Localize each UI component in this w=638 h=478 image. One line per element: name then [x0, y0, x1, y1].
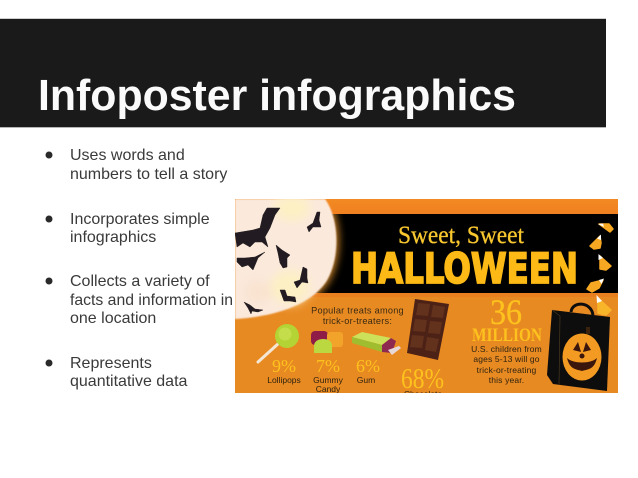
- bat: large: [235, 208, 280, 247]
- candy corn 2: [590, 234, 601, 249]
- bullet: quantitative data: quantitative data: [70, 373, 188, 390]
- stat: 36 million: trick-or-treating: [477, 365, 536, 375]
- subheading: popular treats: trick-or-treaters:: [323, 316, 392, 326]
- top orange band: [326, 199, 618, 214]
- icon: lollipop: [258, 324, 299, 362]
- stat: chocolate: Chocolate: [404, 389, 442, 399]
- stat: gum: Gum: [357, 375, 375, 385]
- title: Infoposter infographics: [38, 71, 516, 120]
- heading: sweet, sweet: Sweet, Sweet: [398, 222, 524, 249]
- stat: 36 million: MILLION: [472, 325, 542, 346]
- stat: 36 million: 36: [490, 292, 522, 332]
- candy corn 5: [596, 295, 611, 315]
- bullet: variety of facts: Collects a variety of: [70, 273, 210, 290]
- stat: gummy candy: 7%: [316, 356, 340, 376]
- bat: middle: [276, 245, 290, 268]
- candy corn 1: [598, 224, 613, 232]
- stat: lollipops: Lollipops: [267, 375, 301, 385]
- stat: 36 million: U.S. children from: [471, 344, 542, 354]
- icon: gum pack: [352, 332, 401, 355]
- bat: lower right: [294, 267, 308, 288]
- bullet list: [46, 147, 233, 390]
- moon glow patches: [244, 195, 310, 304]
- lower orange edge: [290, 293, 618, 297]
- bat: small top: [307, 212, 321, 232]
- moon: [235, 199, 336, 319]
- bats: [235, 208, 321, 314]
- title banner: [0, 18, 606, 128]
- bullet: simple infographics: Incorporates simple: [70, 211, 210, 228]
- halloween poster: [235, 195, 618, 399]
- stat: gummy candy: Candy: [316, 384, 341, 394]
- stat: lollipops: 9%: [272, 356, 296, 376]
- bullet: uses words and numbers: numbers to tell a story: [70, 166, 227, 183]
- candy corn column: [587, 224, 613, 315]
- bullet: variety of facts: [46, 273, 233, 327]
- bullet: quantitative data: [46, 355, 188, 390]
- heading: halloween: HALLOWEEN: [351, 244, 578, 293]
- bullet: simple infographics: [46, 211, 210, 246]
- stat: gummy candy: Gummy: [313, 375, 344, 385]
- bullet: uses words and numbers: [46, 147, 227, 183]
- bat: left: [237, 252, 265, 270]
- bullet: variety of facts: one location: [70, 310, 156, 327]
- bullet: quantitative data: Represents: [70, 355, 152, 372]
- icon: gummy candy: [311, 331, 343, 353]
- bullet: simple infographics: infographics: [70, 229, 156, 246]
- stat: 36 million: this year.: [489, 375, 524, 385]
- stat: chocolate: 68%: [401, 363, 444, 395]
- stat: 36 million: ages 5-13 will go: [473, 354, 540, 364]
- candy corn 3: [598, 254, 611, 270]
- icon: chocolate bar: [407, 299, 449, 360]
- stat: 36 million: [471, 292, 542, 385]
- stat: lollipops: [268, 360, 300, 384]
- bullet: uses words and numbers: Uses words and: [70, 147, 185, 164]
- poster background: [235, 199, 618, 393]
- candy corn 4: [587, 278, 604, 292]
- icon: pumpkin treat bag: [547, 304, 610, 391]
- bat: bottom left: [244, 302, 263, 314]
- stat: gum: [356, 360, 380, 383]
- subheading: popular treats: [312, 307, 403, 324]
- stat: chocolate: [402, 369, 444, 393]
- subheading: popular treats: Popular treats among: [311, 306, 404, 316]
- bullet: variety of facts: facts and information in: [70, 292, 233, 309]
- stat: gummy candy: [314, 360, 343, 393]
- stat: gum: 6%: [356, 356, 380, 376]
- bat: lower: [280, 290, 296, 302]
- black banner: [315, 214, 618, 293]
